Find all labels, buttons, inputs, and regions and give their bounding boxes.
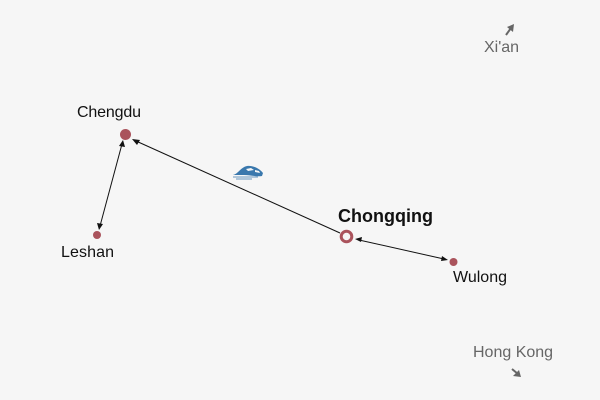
label: Chengdu: Chengdu <box>77 104 141 121</box>
arrow: Chongqing to Chengdu <box>132 139 340 233</box>
label: Hong Kong: Hong Kong <box>473 344 553 361</box>
arrow: Chengdu to Leshan <box>97 140 125 230</box>
marker: Wulong <box>450 258 458 266</box>
arrow: toward Hong Kong <box>512 369 521 377</box>
marker: Chongqing <box>341 231 352 242</box>
marker: Chengdu <box>120 129 131 140</box>
label: Leshan: Leshan <box>61 244 114 261</box>
label: Chongqing: Chongqing <box>338 206 433 226</box>
label: Wulong: Wulong <box>453 269 507 286</box>
marker: Leshan <box>93 231 101 239</box>
label: Xi'an: Xi'an <box>484 39 519 56</box>
icon: high-speed train <box>233 166 263 179</box>
arrow: Chongqing to Wulong <box>355 237 448 261</box>
arrow: toward Xi'an <box>506 24 514 35</box>
